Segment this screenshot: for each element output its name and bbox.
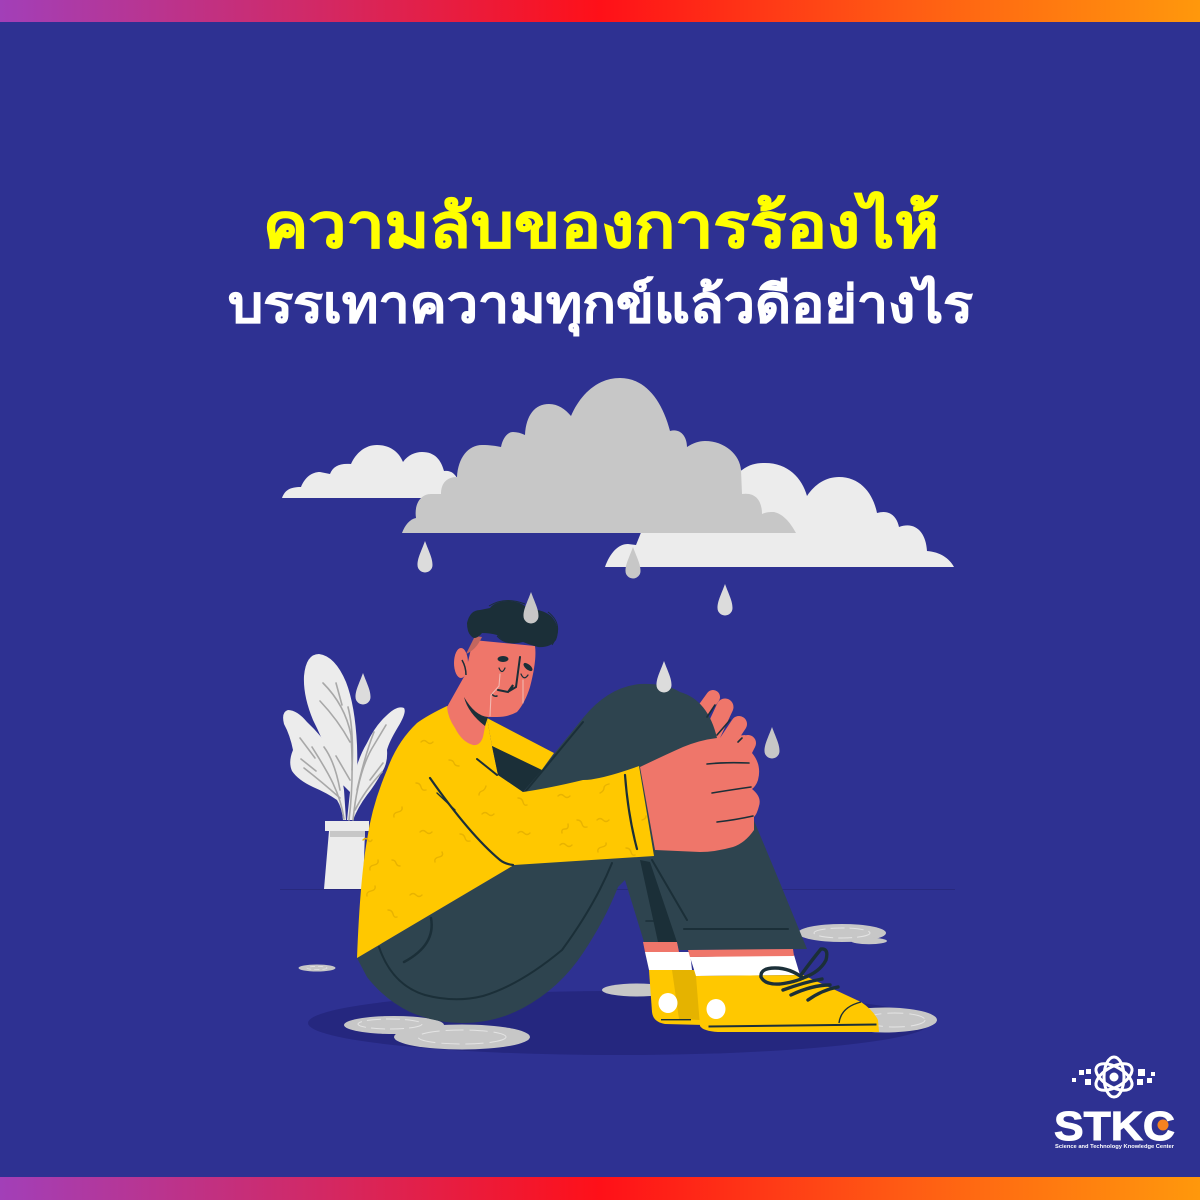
puddle behind feet <box>602 984 672 996</box>
logo pixels <box>1072 1069 1155 1085</box>
sock stripes <box>690 955 800 976</box>
title <box>228 191 974 337</box>
raindrop on head <box>524 592 538 624</box>
inner shadow <box>492 746 542 792</box>
logo wordmark: STKC <box>1054 1103 1175 1149</box>
leg inner shadow <box>640 860 677 942</box>
top gradient bar <box>0 0 1200 22</box>
potted plant <box>283 654 405 889</box>
cloud: right <box>605 463 954 567</box>
STKC logo <box>1054 1057 1175 1150</box>
neck shadow <box>464 697 488 726</box>
clouds <box>282 378 954 567</box>
puddle left front <box>394 1024 530 1050</box>
sideburn <box>466 636 482 654</box>
puddle under shoe <box>833 1008 937 1032</box>
logo dot <box>1158 1120 1168 1130</box>
sweater squiggles <box>363 740 646 917</box>
near foot <box>688 949 879 1032</box>
raindrop by hand <box>764 727 780 758</box>
leaf: centre <box>304 654 357 820</box>
legs <box>357 684 807 1023</box>
leg creases <box>379 722 788 999</box>
back shoulder <box>487 718 554 771</box>
leaf: left <box>283 710 346 820</box>
title line 1: ความลับของการร้องไห้ <box>263 191 939 260</box>
mouth <box>492 694 497 696</box>
logo atom icon <box>1092 1057 1136 1097</box>
shoe <box>649 970 704 1025</box>
puddles <box>298 924 937 1050</box>
tears <box>490 674 523 716</box>
ear <box>454 648 468 678</box>
facial features <box>490 656 534 716</box>
nose <box>498 657 520 692</box>
puddle small left <box>298 964 336 972</box>
logo tagline: Science and Technology Knowledge Center <box>1055 1144 1175 1150</box>
ground shadow <box>308 991 930 1055</box>
hand <box>640 735 760 852</box>
person <box>357 600 879 1032</box>
raindrop <box>626 547 640 578</box>
raindrop above plant <box>356 673 370 704</box>
neck and face <box>447 640 535 745</box>
shoe <box>696 975 879 1032</box>
cloud: left <box>282 445 458 498</box>
finger lines <box>707 705 753 822</box>
puddle <box>798 924 886 942</box>
eyebrows <box>498 656 534 673</box>
title line 2: บรรเทาความทุกข์แล้วดีอย่างไร <box>228 275 974 337</box>
leaf veins <box>300 683 386 820</box>
sleeve and arm creases <box>430 759 637 865</box>
torso and sleeve <box>357 706 654 958</box>
hair <box>467 601 558 647</box>
raindrop <box>418 541 432 572</box>
cloud: middle <box>402 378 796 533</box>
raindrop <box>718 584 732 616</box>
ground line <box>280 889 955 890</box>
raindrops <box>418 541 732 616</box>
puddle small <box>851 938 887 944</box>
laces <box>761 949 838 1000</box>
bottom gradient bar <box>0 1177 1200 1200</box>
sock <box>645 952 692 970</box>
fingers behind knee <box>700 697 748 755</box>
raindrop on knee <box>656 661 672 692</box>
hair outline <box>489 600 558 645</box>
puddle left <box>344 1016 444 1034</box>
pot <box>324 821 369 889</box>
eyes <box>499 668 528 678</box>
far foot <box>643 942 704 1025</box>
leaf: right <box>351 707 405 820</box>
